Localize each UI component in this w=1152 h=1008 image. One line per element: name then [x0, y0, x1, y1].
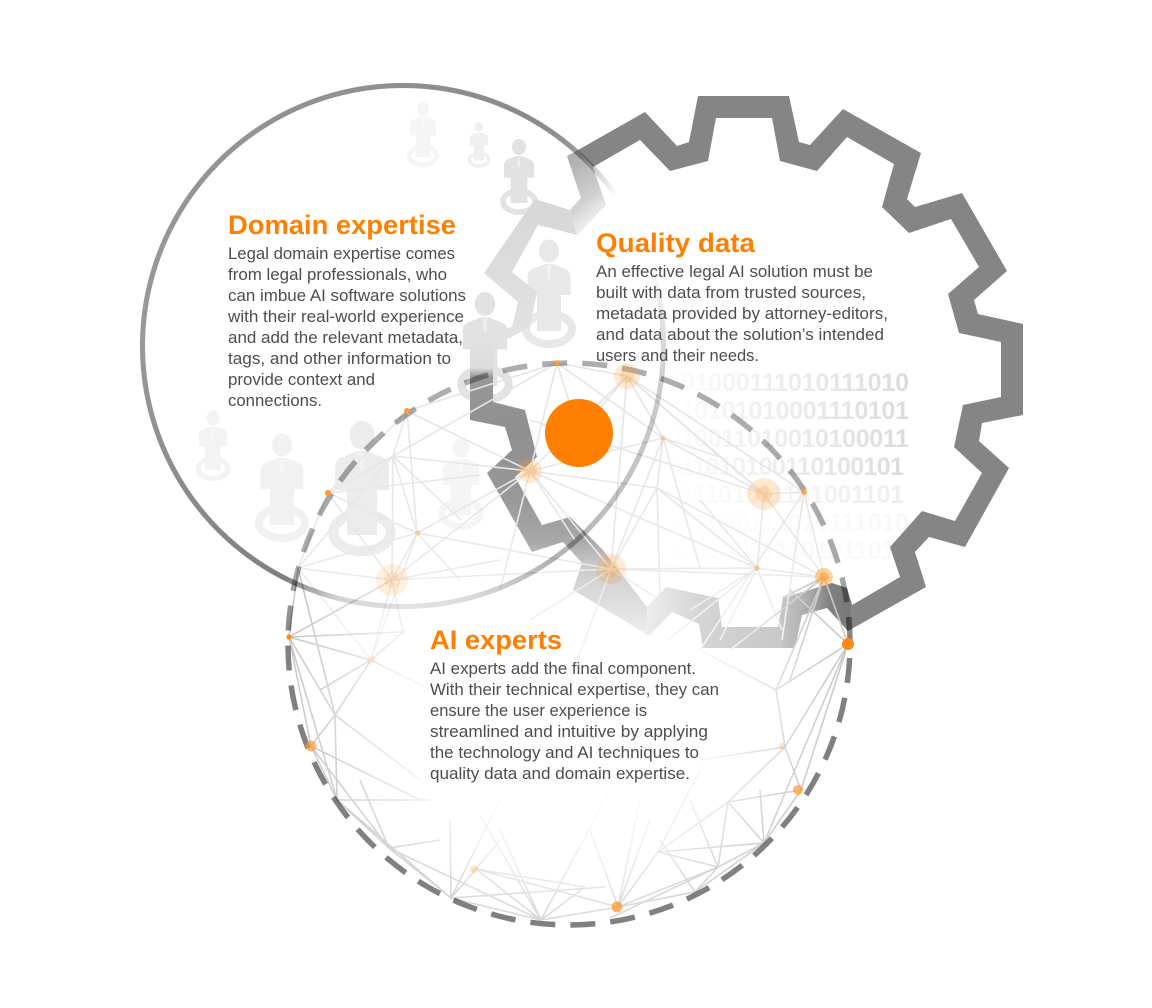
- node: halo centre: [518, 459, 542, 483]
- binary digits block: 101000111010111010: [667, 369, 909, 397]
- node: far left: [286, 634, 292, 640]
- binary digits block: 010100011101011010: [667, 537, 909, 565]
- body: quality data: [596, 263, 888, 365]
- body: domain expertise: and add the relevant metadata,: [228, 329, 463, 347]
- body: AI experts: quality data and domain expertise.: [430, 765, 690, 783]
- network nodes: [286, 360, 854, 912]
- node: faint lower right: [778, 742, 786, 750]
- node: far right: [842, 638, 854, 650]
- body: domain expertise: with their real-world experience: [227, 308, 464, 326]
- node: right small: [801, 489, 807, 495]
- icon: person 9: [442, 438, 480, 526]
- node: right strong: [815, 568, 833, 586]
- body: AI experts: the technology and AI techniques to: [430, 744, 699, 762]
- body: domain expertise: connections.: [228, 392, 322, 410]
- node: pale bottom: [470, 865, 478, 873]
- node: pale faint left: [400, 629, 406, 635]
- body: quality data: built with data from trusted sources,: [596, 284, 866, 302]
- binary digits block: 011101011101001101: [667, 481, 904, 509]
- node: left small: [325, 490, 331, 496]
- node: halo lower left: [376, 564, 408, 596]
- body: domain expertise: tags, and other information to: [228, 350, 451, 368]
- node: top small: [554, 360, 560, 366]
- node: halo lower centre: [596, 554, 626, 584]
- body: quality data: An effective legal AI solution must be: [596, 263, 873, 281]
- text block: domain expertise: [227, 210, 466, 410]
- body: AI experts: With their technical expertise, they can: [430, 681, 719, 699]
- node: pale left: [415, 530, 421, 536]
- icon: person 2: [469, 122, 489, 166]
- icon: person 1: [409, 102, 437, 165]
- body: domain expertise: [227, 245, 466, 410]
- central orange circle: [545, 399, 613, 467]
- icon group: legal professionals: [198, 102, 572, 551]
- binary digits block: [667, 369, 909, 565]
- heading: AI experts: AI experts: [430, 625, 562, 655]
- node: lower right: [793, 785, 803, 795]
- body: AI experts: ensure the user experience is: [430, 702, 647, 720]
- binary digits block: 101000111010111010: [667, 509, 909, 537]
- heading: quality data: Quality data: [596, 228, 756, 258]
- dashed circle: AI experts: [288, 363, 850, 925]
- binary digits block: 011010100110100101: [667, 453, 904, 481]
- text block: AI experts: [430, 625, 719, 783]
- network lines: upper: [298, 363, 824, 680]
- node: lower left: [306, 740, 316, 752]
- network lines: lower: [289, 568, 848, 920]
- binary digits block: 010011010010100011: [667, 425, 909, 453]
- node: pale right: [754, 565, 760, 571]
- node: halo top right: [614, 363, 640, 389]
- gear: bottom section: [647, 583, 852, 648]
- icon: person 7: [259, 434, 305, 538]
- icon: person 6: [198, 411, 228, 478]
- body: domain expertise: provide context and: [228, 371, 375, 389]
- icon: person 8: [333, 421, 391, 551]
- gear: upper tooth fading inside the domain circle: [567, 150, 606, 235]
- body: domain expertise: can imbue AI software solutions: [228, 287, 466, 305]
- icon: person 4: [526, 240, 572, 344]
- text block: quality data: [596, 228, 888, 365]
- body: AI experts: AI experts add the final component.: [430, 660, 696, 678]
- body: domain expertise: Legal domain expertise comes: [228, 245, 455, 263]
- body: AI experts: [430, 660, 719, 783]
- node: pale: [660, 435, 666, 441]
- body: AI experts: streamlined and intuitive by applying: [430, 723, 708, 741]
- body: quality data: users and their needs.: [596, 347, 759, 365]
- domain expertise circle ring: [138, 80, 668, 610]
- body: quality data: metadata provided by attorney-editors,: [596, 305, 888, 323]
- binary digits block: 010101010001110101: [667, 397, 909, 425]
- gear outline: [470, 96, 1023, 648]
- node: upper left small: [404, 408, 410, 414]
- node: bottom: [612, 902, 622, 912]
- body: domain expertise: from legal professionals, who: [228, 266, 447, 284]
- node: faint left: [366, 656, 376, 664]
- gear: left section overlapping circles: [470, 199, 648, 635]
- gear: dark outer section: [578, 96, 1023, 631]
- icon: person 3: [503, 139, 535, 212]
- heading: domain expertise: Domain expertise: [228, 210, 456, 240]
- node: halo right: [748, 478, 780, 510]
- body: quality data: and data about the solution’s intended: [596, 326, 884, 344]
- icon: person 5: [461, 292, 509, 400]
